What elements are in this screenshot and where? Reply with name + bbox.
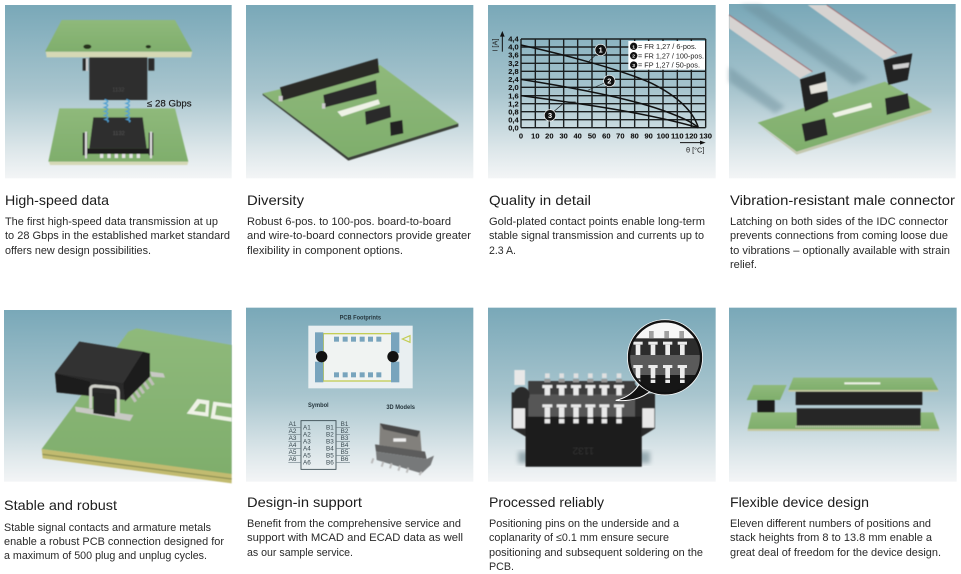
large stack upper board xyxy=(788,378,938,392)
connector pin symbol: A2 xyxy=(289,428,297,435)
text block: design-in support: Benefit from the comprehensive service and xyxy=(247,518,461,530)
text block: processed reliably: coplanarity of ≤0.1 mm ensure secure xyxy=(489,532,669,544)
line chart: current vs temperature: 40 xyxy=(574,131,582,140)
connector pin symbol: B2 xyxy=(326,431,334,438)
line chart: current vs temperature: θ [°C] xyxy=(686,145,704,154)
text block: flexible device design: stack heights from 8 to 13.8 mm enable a xyxy=(730,532,932,544)
axis labels: 0,4 xyxy=(508,115,520,124)
connector pin symbol: B1 xyxy=(326,424,334,431)
connector body xyxy=(512,381,655,467)
text block: vibration-resistant male connector: relief. xyxy=(730,259,757,271)
connector pin symbol: B5 xyxy=(341,449,349,456)
axis labels: 0,0 xyxy=(508,123,519,132)
line chart: current vs temperature: 90 xyxy=(645,131,653,140)
legend: 1 xyxy=(632,44,635,50)
heading: diversity: Diversity xyxy=(247,192,304,208)
upper connector xyxy=(83,57,154,100)
white side clips xyxy=(513,370,654,428)
connector pin symbol: A1 xyxy=(289,421,297,428)
text block: high-speed data xyxy=(5,216,230,257)
text block: stable and robust: enable a robust PCB connection designed for xyxy=(4,536,224,548)
text block: flexible device design xyxy=(730,518,941,559)
armature metal clip xyxy=(91,386,118,417)
line chart: current vs temperature: 70 xyxy=(616,131,624,140)
line chart: current vs temperature: 130 xyxy=(699,131,712,140)
axis labels: 1,6 xyxy=(508,91,519,100)
short connector xyxy=(365,105,391,125)
large stack upper connector xyxy=(796,392,922,405)
connector pin symbol: B6 xyxy=(341,456,349,463)
panel: design-in support image xyxy=(246,308,473,482)
medium connector xyxy=(322,80,377,109)
panel: stable and robust image xyxy=(4,310,232,483)
line chart: current vs temperature: 50 xyxy=(588,131,596,140)
text block: quality in detail: stable signal transmission and currents up to xyxy=(489,230,704,242)
board label xyxy=(337,99,380,117)
text block: high-speed data: The first high-speed data transmission at up xyxy=(5,216,218,228)
axis labels: 0,8 xyxy=(508,107,519,116)
text block: vibration-resistant male connector: to vibrations – optionally available with strain xyxy=(730,245,950,257)
circuit board xyxy=(263,65,458,161)
legend: = FR 1,27 / 100-pos. xyxy=(638,51,704,60)
heading: symbol: Symbol xyxy=(308,402,329,409)
icon: signal springs xyxy=(105,99,130,122)
text block: quality in detail: Gold-plated contact points enable long-term xyxy=(489,216,705,228)
connector pin symbol: A4 xyxy=(289,442,297,449)
axis labels: 2,8 xyxy=(508,67,519,76)
connector pin symbol: A5 xyxy=(303,452,311,459)
text block: processed reliably: PCB. xyxy=(489,561,514,573)
left board connector xyxy=(802,118,828,142)
line chart: current vs temperature: 80 xyxy=(631,131,639,140)
text block: vibration-resistant male connector: prevents connections from coming loose due xyxy=(730,230,948,242)
line chart: current vs temperature: 60 xyxy=(602,131,610,140)
manufacturer logo xyxy=(187,399,232,422)
bottom circuit board xyxy=(48,108,188,165)
panel: flexible device design image xyxy=(729,308,957,482)
heading: PCB footprints: PCB Footprints xyxy=(340,314,381,321)
connector body xyxy=(55,342,150,402)
legend: = FR 1,27 / 6-pos. xyxy=(638,42,697,51)
connector pin symbol: A2 xyxy=(303,431,311,438)
connector pin symbol: B5 xyxy=(326,452,334,459)
text block: stable and robust: a maximum of 500 plug and unplug cycles. xyxy=(4,550,207,562)
axis labels xyxy=(508,35,520,132)
smallest connector xyxy=(390,120,403,136)
line chart: current vs temperature: 100 xyxy=(657,131,669,140)
magnified detail callout xyxy=(616,319,703,401)
line chart: current vs temperature: I [A] xyxy=(490,39,499,52)
text block: quality in detail: 2.3 A. xyxy=(489,245,516,257)
connector pin symbol: B2 xyxy=(341,428,349,435)
ribbon cables xyxy=(729,5,897,78)
small stack xyxy=(747,385,787,426)
circuit board xyxy=(42,328,232,483)
heading: processed reliably: Processed reliably xyxy=(489,494,604,510)
connector pin symbol: A3 xyxy=(303,438,311,445)
text block: vibration-resistant male connector xyxy=(730,216,950,271)
curve markers: 3 xyxy=(548,111,552,120)
right board connector xyxy=(885,93,910,115)
connector pin symbol: B3 xyxy=(326,438,334,445)
text block: diversity xyxy=(247,216,471,257)
text block: diversity: Robust 6-pos. to 100-pos. board-to-board xyxy=(247,216,451,228)
heading: design-in support: Design-in support xyxy=(247,494,362,510)
text block: stable and robust: Stable signal contacts and armature metals xyxy=(4,522,212,534)
panel: quality in detail chart xyxy=(488,5,716,178)
connector pin symbol: B6 xyxy=(326,459,334,466)
connector pin symbol: A1 xyxy=(303,424,311,431)
PCB footprint drawing xyxy=(308,326,413,388)
axis labels: 2,0 xyxy=(508,83,519,92)
panel: high-speed data image xyxy=(5,5,232,178)
heading: 3D models: 3D Models xyxy=(386,404,415,411)
ribbon shadows xyxy=(729,5,868,113)
text block: diversity: and wire-to-board connectors provide greater xyxy=(247,230,471,242)
legend xyxy=(628,41,705,70)
connector pin symbol xyxy=(288,421,350,469)
legend: = FP 1,27 / 50-pos. xyxy=(638,61,700,70)
connector pin symbol: B4 xyxy=(326,445,334,452)
text block: flexible device design: Eleven different numbers of positions and xyxy=(730,518,931,530)
panel: diversity image xyxy=(246,5,473,178)
long connector xyxy=(279,58,379,101)
heading: high-speed data: High-speed data xyxy=(5,192,109,208)
panel: processed reliably image xyxy=(488,308,716,482)
lower connector xyxy=(83,117,153,158)
lower connector: 1132 xyxy=(113,131,125,137)
curve markers: 1 xyxy=(599,46,603,55)
axis labels: 1,2 xyxy=(508,99,519,108)
curve markers xyxy=(544,44,615,121)
axis labels: 2,4 xyxy=(508,75,520,84)
top circuit board xyxy=(45,20,192,57)
axis labels: 4,0 xyxy=(508,43,519,52)
line chart: current vs temperature: 0 xyxy=(519,131,523,140)
contact pins xyxy=(542,373,624,423)
heading: stable and robust: Stable and robust xyxy=(4,497,117,513)
3D connector model xyxy=(372,423,434,475)
text block: high-speed data: to 28 Gbps in the established market standard xyxy=(5,230,230,242)
line chart: current vs temperature: 110 xyxy=(671,131,684,140)
text block: design-in support: as our sample service. xyxy=(247,547,353,559)
circuit board xyxy=(758,82,932,155)
text block: design-in support xyxy=(247,518,463,559)
line chart: current vs temperature xyxy=(490,31,712,154)
connector pin symbol: B3 xyxy=(341,435,349,442)
connector pin symbol: A6 xyxy=(303,459,311,466)
text block: flexible device design: great deal of freedom for the device design. xyxy=(730,547,941,559)
board label xyxy=(832,103,872,117)
text block: diversity: flexibility in component options. xyxy=(247,245,403,257)
axis labels: 3,6 xyxy=(508,51,519,60)
text block: processed reliably xyxy=(489,518,703,573)
heading: flexible device design: Flexible device design xyxy=(730,494,869,510)
line chart: current vs temperature: 20 xyxy=(545,131,553,140)
text block: processed reliably: positioning and subsequent soldering on the xyxy=(489,547,703,559)
large stack lower connector xyxy=(797,408,921,426)
legend: 2 xyxy=(632,54,635,60)
left IDC connector xyxy=(800,72,828,112)
curve markers: 2 xyxy=(607,77,611,86)
connector pin symbol: A5 xyxy=(289,449,297,456)
legend: 3 xyxy=(632,63,635,69)
axis labels: 3,2 xyxy=(508,59,519,68)
heading: quality in detail: Quality in detail xyxy=(489,192,591,208)
label: data rate: ≤ 28 Gbps xyxy=(147,99,192,109)
line chart: current vs temperature: 10 xyxy=(531,131,539,140)
connector body: 1132 xyxy=(572,445,594,456)
connector pin symbol: B4 xyxy=(341,442,349,449)
connector pin symbol: A3 xyxy=(289,435,297,442)
upper connector: 1132 xyxy=(112,87,124,93)
line chart: current vs temperature: 120 xyxy=(685,131,698,140)
line chart: current vs temperature: 30 xyxy=(560,131,568,140)
connector pin symbol: A4 xyxy=(303,445,311,452)
angled contact pins xyxy=(124,367,153,402)
metal feet xyxy=(75,372,165,421)
right IDC connector xyxy=(883,53,912,85)
text block: quality in detail xyxy=(489,216,705,257)
connector pin symbol: A6 xyxy=(289,456,297,463)
axis labels: 4,4 xyxy=(508,35,520,44)
text block: stable and robust xyxy=(4,522,224,562)
panel: vibration-resistant connector image xyxy=(729,4,956,178)
bottom board xyxy=(748,412,939,431)
connector pin symbol: B1 xyxy=(341,421,349,428)
text block: high-speed data: offers new design possibilities. xyxy=(5,245,151,257)
text block: vibration-resistant male connector: Latching on both sides of the IDC connector xyxy=(730,216,948,228)
text block: processed reliably: Positioning pins on the underside and a xyxy=(489,518,679,530)
heading: vibration-resistant male connector: Vibration-resistant male connector xyxy=(730,192,955,208)
text block: design-in support: support with MCAD and ECAD data as well xyxy=(247,532,463,544)
